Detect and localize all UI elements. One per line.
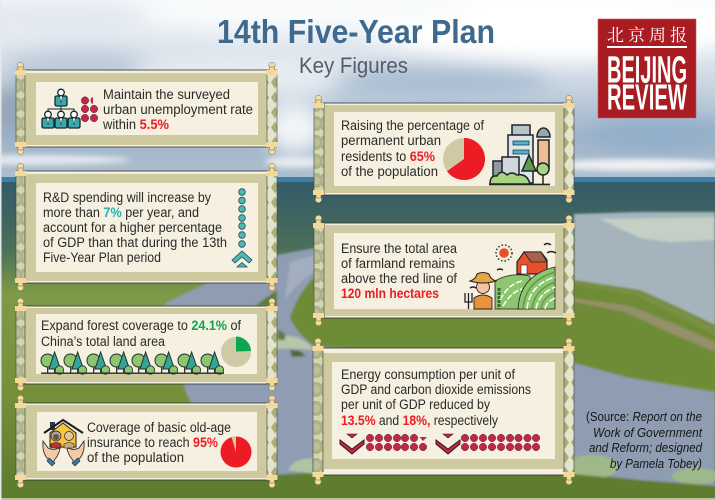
logo: Beijing Review (598, 19, 696, 118)
text: unemployment (102, 87, 253, 133)
text: farmland: Ensure the total area (341, 241, 457, 257)
source note: (Source: Report on the (586, 409, 702, 424)
text: urbanization: residents to 65% (341, 149, 435, 165)
pie chart: 24.1% (221, 336, 251, 367)
text: R&D spending: R&D spending will increase by (43, 190, 212, 206)
icon: elderly couple in house held by hands (43, 420, 84, 466)
icon: unemployment dots (81, 97, 98, 122)
text: old-age insurance: Coverage of basic old-age (87, 420, 231, 436)
text: farmland: of farmland remains (341, 256, 455, 272)
panel: R&D spending (15, 163, 278, 291)
source note: and Reform; designed (589, 440, 703, 455)
icon: row of trees (41, 352, 224, 374)
text: old-age insurance: insurance to reach 95% (87, 435, 218, 451)
text: old-age insurance: of the population (87, 450, 184, 466)
subtitle: Key Figures (299, 53, 408, 78)
text: urbanization: permanent urban (341, 133, 441, 149)
panel: forest coverage (15, 298, 278, 391)
text: forest coverage: China’s total land area (41, 334, 165, 350)
panel: farmland (313, 215, 574, 326)
text: urbanization: Raising the percentage of (341, 118, 484, 134)
icon: city buildings (489, 125, 550, 184)
logo: Beijing Review: 北京周报 (607, 21, 687, 46)
text: farmland: 120 mln hectares (341, 286, 439, 302)
panel: old-age insurance (15, 395, 278, 488)
text: energy and emissions: per unit of GDP reduced by (341, 397, 491, 413)
source note: by Pamela Tobey) (610, 456, 702, 471)
text: farmland: above the red line of (341, 271, 457, 287)
main water (165, 245, 715, 486)
peninsula (290, 252, 574, 363)
panel: urbanization (313, 95, 574, 203)
icon: energy reduction dots (340, 434, 427, 454)
text: energy and emissions: GDP and carbon dioxide emissions (341, 382, 531, 398)
icon: staff hierarchy (42, 89, 80, 128)
text: forest coverage: Expand forest coverage to 24.1% of (41, 318, 241, 334)
source note: Work of Government (593, 425, 703, 440)
text: old-age insurance (87, 420, 231, 466)
pie chart: 65% (443, 138, 485, 180)
text: R&D spending: Five-Year Plan period (43, 250, 161, 266)
icon: farmer and fields (465, 244, 556, 309)
text: energy and emissions: 13.5% and 18%, respectively (341, 413, 499, 429)
text: unemployment: Maintain the surveyed (103, 87, 230, 103)
text: urbanization: of the population (341, 164, 438, 180)
text: R&D spending (43, 190, 227, 266)
text: R&D spending: of GDP than that during the 13th (43, 235, 227, 251)
panel: energy and emissions (312, 338, 574, 485)
icon: emissions reduction dots (436, 434, 540, 454)
text: R&D spending: account for a higher percentage (43, 220, 222, 236)
source note (586, 409, 703, 471)
text: urbanization (341, 118, 484, 180)
panel: unemployment (15, 62, 278, 155)
text: unemployment: within 5.5% (102, 117, 169, 133)
pie chart: 95% (220, 436, 252, 468)
text: R&D spending: more than 7% per year, and (43, 205, 199, 221)
upper right water (574, 212, 715, 330)
text: energy and emissions: Energy consumption per unit of (341, 367, 515, 383)
icon: rising dots with arrow (232, 189, 252, 267)
text: forest coverage (41, 318, 241, 350)
title: 14th Five-Year Plan (217, 13, 495, 50)
text: energy and emissions (341, 367, 531, 429)
text: farmland (341, 241, 457, 302)
text: unemployment: urban unemployment rate (103, 102, 253, 118)
foreground grass (0, 473, 715, 500)
shoals and small islands (277, 336, 313, 350)
